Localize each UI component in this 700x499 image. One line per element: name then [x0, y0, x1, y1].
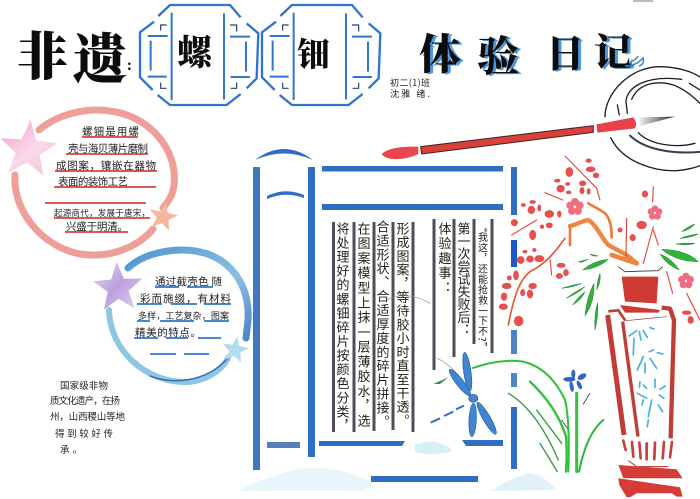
text: heritage note: 质文化遗产，在扬: [50, 393, 120, 407]
title: 体验日记: 验: [477, 24, 519, 84]
title: 非遗: 非: [16, 15, 68, 90]
text: description: 兴盛于明清。: [66, 219, 128, 234]
leaves: [562, 224, 698, 330]
text: features: 多样，工艺复杂，图案: [138, 309, 229, 322]
blue ring: [109, 250, 248, 382]
icon: blue flower: [563, 370, 587, 392]
panel: blue ring features: [92, 250, 251, 382]
underlines: [45, 137, 157, 232]
text: features: [135, 274, 232, 340]
title: 体验日记: 记: [594, 22, 632, 77]
title: 非遗: :: [127, 55, 132, 75]
text: diary columns: 体验趣事：: [436, 222, 454, 294]
column rules: [334, 219, 492, 432]
text: diary columns: [334, 220, 490, 432]
pale blue ground smudges: [241, 0, 653, 491]
panel: book frame: [253, 149, 517, 482]
red ring: [15, 110, 174, 255]
vase: [608, 267, 683, 497]
text: heritage note: [50, 378, 125, 456]
text: features: 彩而施缀，有材料: [140, 291, 232, 306]
bamboo painting on vase: [629, 328, 665, 427]
title frame: 螺: [140, 5, 258, 105]
text: diary columns: 形成图案，等待胶小时直至干透。: [394, 222, 412, 427]
text: diary columns: 将处理好的螺钿碎片按颜色分类，: [334, 222, 352, 432]
title frame: 钿: [262, 5, 380, 105]
underlines: [134, 287, 231, 354]
icon: dragonfly: [387, 296, 499, 437]
text: features: 通过截壳色 随: [155, 274, 222, 289]
title frame: 螺: 螺: [177, 26, 215, 76]
author note: 初二(1)班: [390, 76, 430, 89]
icon: pale blue star: [220, 334, 251, 363]
text: description: 壳与海贝薄片磨制: [68, 141, 148, 156]
plum blossom, vase and orchid: [473, 156, 700, 497]
text: features: 精美的特点。: [135, 325, 201, 340]
title: 体验日记: 日: [546, 23, 584, 78]
title: 非遗: [16, 15, 132, 94]
title: 非遗: 遗: [73, 17, 127, 94]
title frame: 钿: 钿: [297, 29, 330, 76]
icon: ink stone: [605, 67, 700, 171]
branches: [508, 156, 700, 325]
plum petals: [499, 159, 693, 326]
text: diary columns: 第一次尝试失败后：: [454, 222, 474, 336]
title: 体验日记: 记: [597, 23, 635, 78]
icon: calligraphy brush: [382, 117, 675, 159]
icon: pink star: [0, 118, 59, 177]
orchid: [473, 361, 603, 472]
text: heritage note: 承。: [60, 442, 82, 456]
title: 体验日记: 日: [549, 24, 587, 79]
text: description: 成图案，镶嵌在器物: [56, 158, 156, 173]
text: diary columns: “我这，还能抢救一下不?”: [476, 222, 490, 352]
title: 体验日记: 验: [480, 25, 522, 85]
text: description: [54, 124, 156, 234]
author note: [390, 76, 430, 100]
pink blossoms: [566, 198, 694, 288]
title: 体验日记: [419, 22, 644, 85]
icon: purple star: [92, 261, 144, 310]
text: diary columns: 在图案模型上抹一层薄胶水，选: [354, 222, 374, 428]
text: description: 表面的装饰工艺: [58, 174, 128, 189]
text: heritage note: 州，山西稷山等地: [50, 409, 125, 423]
title: 体验日记: 体: [419, 22, 461, 82]
title: 体验日记: 体: [422, 23, 464, 83]
icon: peach star: [147, 199, 180, 232]
text: diary columns: 合适形状、合适厚度的碎片拼接。: [374, 220, 392, 428]
text: heritage note: 国家级非物: [60, 378, 108, 392]
text: heritage note: 得到较好传: [55, 426, 113, 440]
panel: red ring history: [0, 110, 180, 255]
text: description: 螺钿是用螺: [82, 124, 140, 139]
text: description: 起源商代，发展于唐宋，: [54, 207, 150, 219]
author note: 沈雅 绪.: [390, 87, 430, 100]
